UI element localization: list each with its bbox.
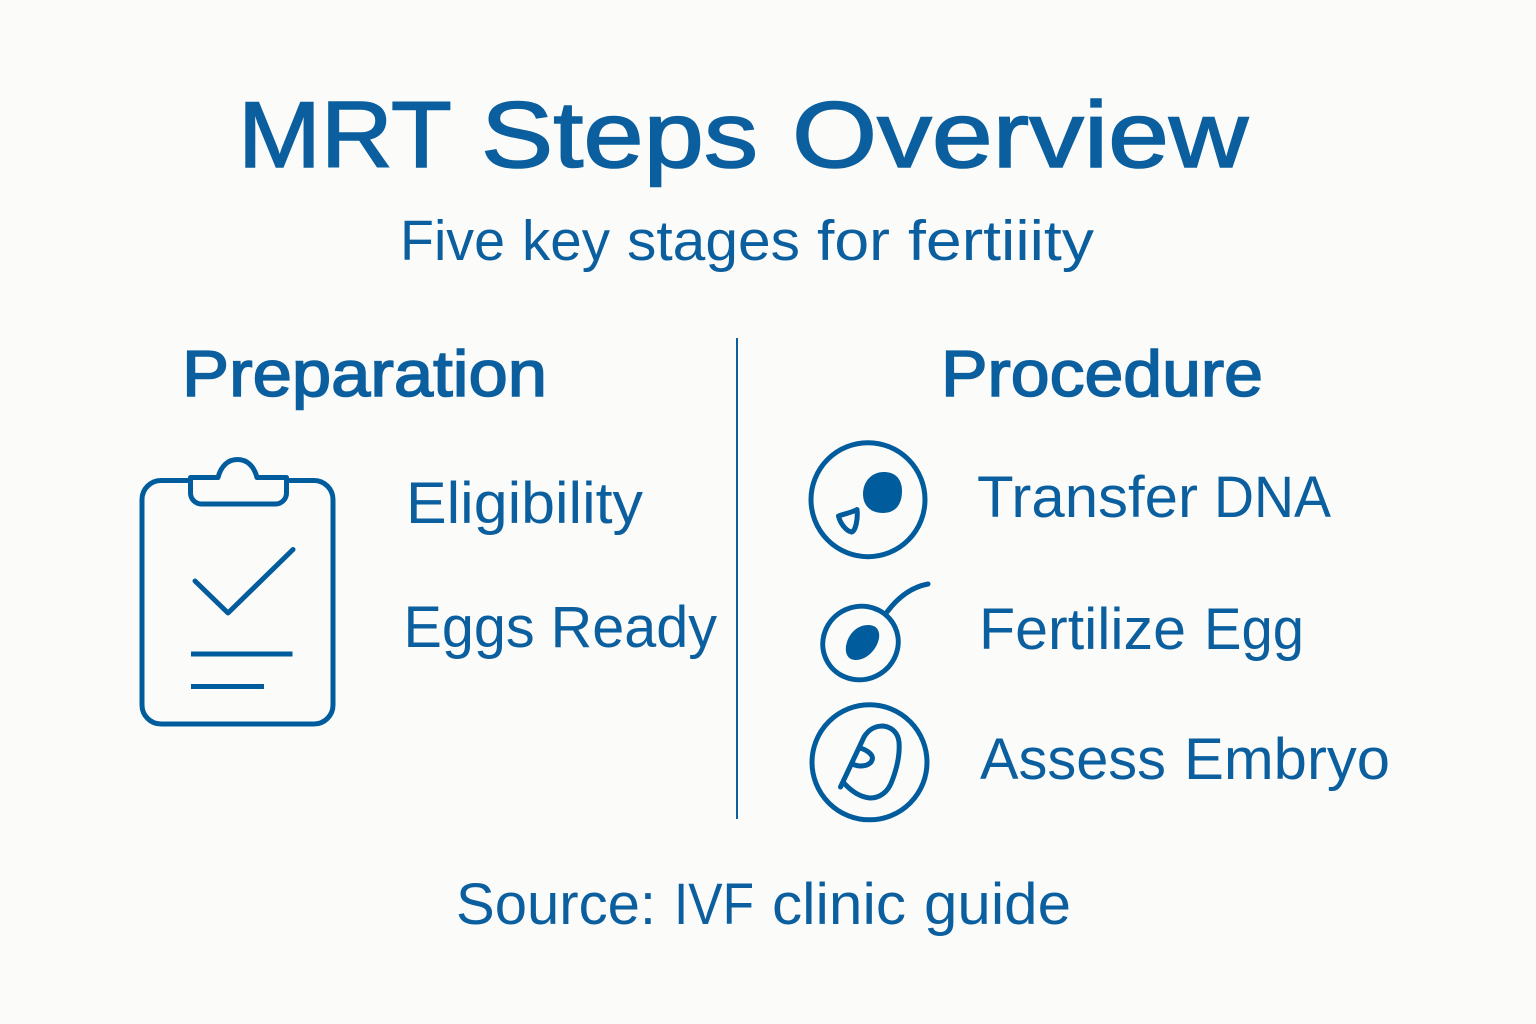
subtitle: Five [400, 209, 505, 273]
icon: embryo assessment [812, 705, 927, 820]
label: assess embryo: Assess [980, 727, 1166, 792]
label: assess embryo: Embryo [1184, 727, 1390, 792]
panel: procedure [811, 337, 1390, 820]
source note: Source: [456, 872, 656, 937]
title: MRT [238, 82, 450, 187]
panel: preparation [142, 337, 717, 724]
icon: fertilized egg with sperm tail [811, 584, 928, 692]
subtitle: stages [627, 209, 800, 273]
heading: preparation: Preparation [182, 337, 547, 410]
title: Steps [481, 82, 758, 187]
icon: DNA transfer cell [811, 443, 925, 557]
center divider [736, 338, 738, 819]
label: fertilize egg: Fertilize [979, 597, 1186, 662]
subtitle: key [522, 209, 610, 273]
source note: guide [924, 872, 1071, 937]
label: eligibility: Eligibility [406, 471, 643, 536]
heading: procedure: Procedure [941, 337, 1263, 410]
subtitle: fertiiity [908, 209, 1095, 273]
title: Overview [792, 82, 1249, 187]
source note: IVF [674, 872, 754, 937]
label: fertilize egg: Egg [1204, 597, 1304, 662]
label: transfer dna: DNA [1214, 465, 1331, 530]
source note: clinic [772, 872, 906, 937]
icon: clipboard with checkmark [142, 460, 333, 724]
label: eggs ready: Eggs Ready [404, 595, 717, 660]
subtitle: for [817, 209, 890, 273]
label: transfer dna: Transfer [977, 465, 1198, 530]
